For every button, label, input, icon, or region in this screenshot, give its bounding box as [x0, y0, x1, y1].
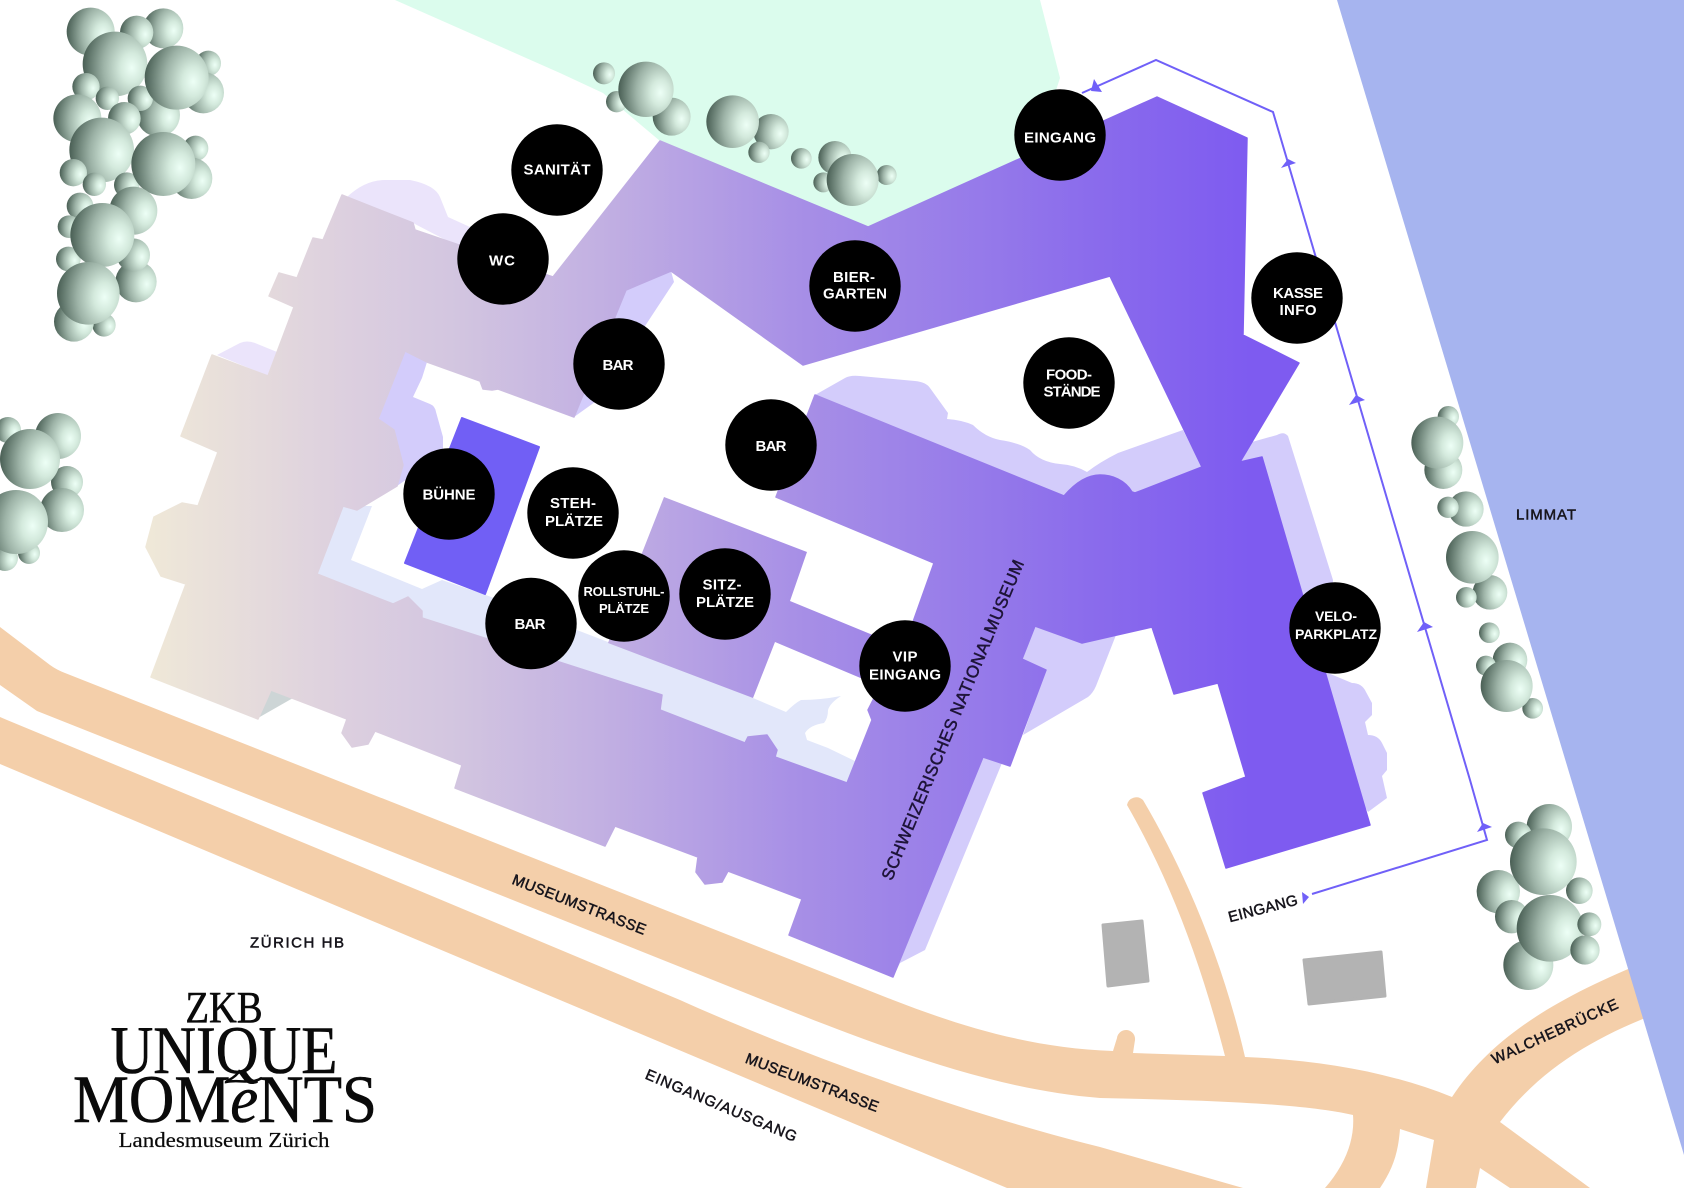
marker: Bar centre — [725, 399, 817, 491]
entrance route with arrows — [1082, 60, 1492, 904]
label: Schweizerisches Nationalmuseum: SCHWEIZERISCHES NATIONALMUSEUM — [878, 557, 1028, 883]
marker: Bar north: BAR — [602, 357, 634, 374]
marker: VIP Eingang — [859, 620, 951, 712]
trees: riverbank cluster — [1411, 406, 1543, 719]
marker: Eingang: EINGANG — [1024, 130, 1096, 146]
marker: Biergarten: GARTEN — [823, 286, 887, 302]
marker: Rollstuhlplätze: PLÄTZE — [599, 601, 649, 616]
label: Museumstrasse upper: MUSEUMSTRASSE — [510, 871, 648, 939]
marker: Bar north — [573, 318, 665, 410]
marker: Veloparkplatz: PARKPLATZ — [1295, 626, 1377, 642]
label: Zürich HB: ZÜRICH HB — [250, 934, 344, 952]
marker: VIP Eingang: VIP — [892, 648, 918, 666]
marker: Rollstuhlplätze — [578, 550, 670, 642]
marker: Kasse Info: KASSE — [1273, 285, 1323, 302]
marker: WC: WC — [489, 252, 515, 270]
marker: Kasse Info — [1251, 252, 1343, 344]
logo: ZKB Unique Moments: MOMeNTS — [73, 1061, 377, 1137]
logo: ZKB Unique Moments — [73, 983, 377, 1152]
marker: WC — [457, 213, 549, 305]
marker: Kasse Info: INFO — [1280, 302, 1317, 319]
parking block right — [1304, 952, 1385, 1004]
logo: ZKB Unique Moments: ZKB — [186, 983, 262, 1032]
marker: Stehplätze — [527, 467, 619, 559]
marker: Biergarten — [809, 240, 901, 332]
label: Eingang south: EINGANG — [1227, 892, 1299, 926]
marker: Veloparkplatz: VELO- — [1315, 608, 1357, 624]
marker: Foodstände — [1023, 337, 1115, 429]
road: Museumstrasse lower — [0, 717, 1243, 1188]
marker: Bühne — [403, 448, 495, 540]
marker: Biergarten: BIER- — [833, 269, 875, 286]
roads: Museumstrasse upper, access lane, Walchebrücke — [0, 627, 1650, 1188]
trees: west edge cluster — [0, 413, 84, 571]
marker: Bar centre: BAR — [756, 438, 787, 455]
marker: Eingang — [1014, 89, 1106, 181]
marker: Rollstuhlplätze: ROLLSTUHL- — [584, 584, 664, 599]
marker: Foodstände: FOOD- — [1046, 366, 1092, 384]
marker: Stehplätze: PLÄTZE — [545, 513, 603, 530]
label: Museumstrasse lower: MUSEUMSTRASSE — [743, 1050, 881, 1116]
trees: lawn cluster — [593, 62, 897, 206]
marker: Sanität: SANITÄT — [524, 162, 590, 178]
building shadows — [217, 180, 1387, 977]
label: Limmat: LIMMAT — [1516, 506, 1576, 524]
museum building — [146, 97, 1370, 977]
marker: Foodstände: STÄNDE — [1044, 384, 1100, 400]
logo: ZKB Unique Moments: UNIQUE — [110, 1012, 338, 1088]
marker: VIP Eingang: EINGANG — [869, 666, 941, 684]
marker: Sitzplätze: PLÄTZE — [696, 594, 754, 611]
marker: Sitzplätze — [679, 548, 771, 640]
label: Eingang/Ausgang: EINGANG/AUSGANG — [643, 1066, 799, 1146]
marker: Bar south — [485, 578, 577, 669]
parking block left — [1103, 921, 1148, 986]
marker: Veloparkplatz — [1289, 582, 1381, 674]
trees: north-west cluster — [53, 8, 224, 342]
marker: Sanität — [511, 124, 603, 216]
stage — [405, 418, 539, 594]
marker: Sitzplätze: SITZ- — [702, 576, 742, 594]
lawn — [395, 0, 1060, 227]
marker: Stehplätze: STEH- — [550, 495, 596, 512]
river: Limmat — [1337, 0, 1684, 1155]
logo: ZKB Unique Moments: Landesmuseum Zürich — [118, 1128, 330, 1152]
seating block — [608, 497, 885, 698]
marker: Bühne: BÜHNE — [422, 486, 476, 504]
marker: Bar south: BAR — [514, 616, 546, 633]
trees: south-east cluster — [1477, 804, 1601, 990]
label: Walchebrücke: WALCHEBRÜCKE — [1489, 995, 1621, 1068]
